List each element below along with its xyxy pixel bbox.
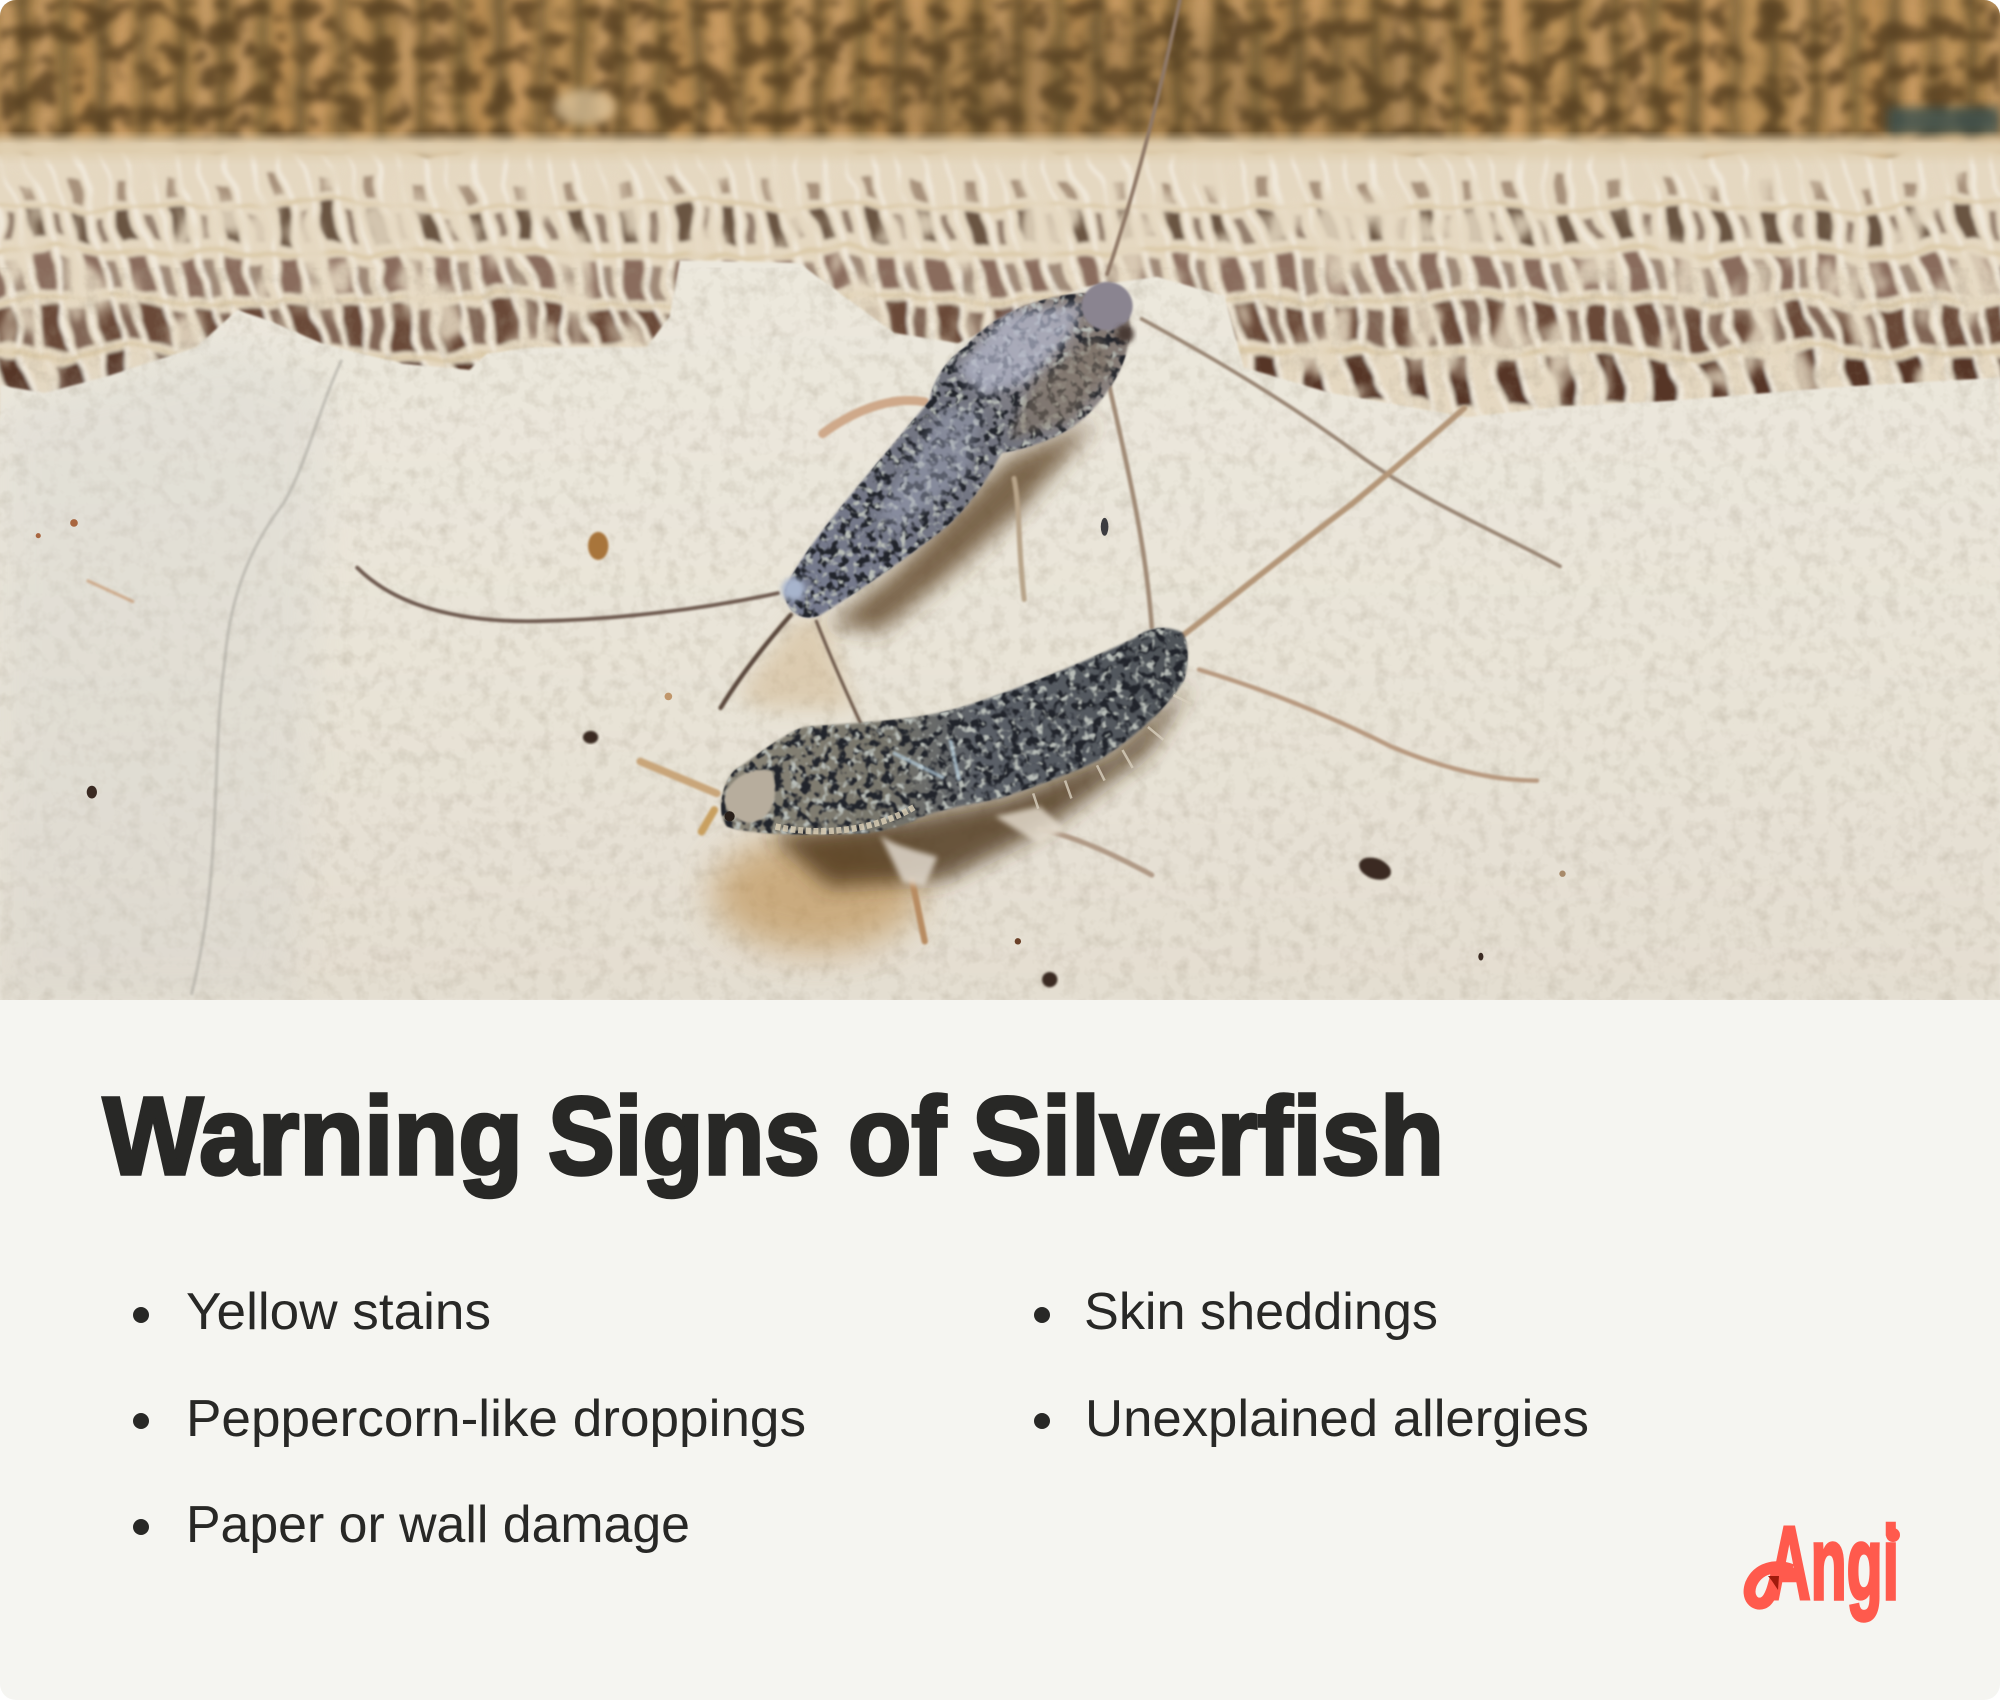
paper crack	[191, 360, 342, 995]
cream mesh band	[0, 138, 2000, 421]
logo: Angi	[1750, 1506, 1900, 1622]
antennae and cerci	[357, 0, 1560, 941]
upper silverfish	[782, 282, 1134, 617]
title: Warning	[103, 1075, 523, 1198]
title: Signs	[548, 1075, 820, 1198]
list item: skin sheddings: Skin sheddings	[1084, 1283, 1438, 1341]
shadow of upper silverfish	[829, 421, 1097, 631]
torn paper sheet	[0, 260, 2000, 1000]
list item: unexplained allergies: Unexplained allergies	[1085, 1390, 1589, 1448]
list item: peppercorn-like droppings: Peppercorn-like droppings	[186, 1390, 806, 1448]
lower silverfish	[721, 628, 1191, 886]
tan stain between cerci	[737, 619, 855, 708]
list item: paper or wall damage: Paper or wall damage	[186, 1496, 690, 1554]
logo: Angi: Angi	[1768, 1506, 1899, 1622]
title	[101, 1092, 1440, 1200]
burlap background band	[0, 0, 2000, 163]
list: right column	[1034, 1283, 1589, 1448]
brown stain below lower silverfish	[712, 834, 921, 952]
photo: two silverfish on torn paper and burlap	[0, 0, 2000, 1000]
title: Silverfish	[972, 1075, 1444, 1198]
list: left column	[133, 1283, 806, 1554]
list item: yellow stains	[133, 1292, 490, 1330]
debris specks	[36, 518, 1566, 987]
list item: yellow stains: Yellow stains	[186, 1283, 491, 1341]
dark shadow beneath lower silverfish	[772, 682, 1193, 886]
title: of	[848, 1075, 946, 1198]
